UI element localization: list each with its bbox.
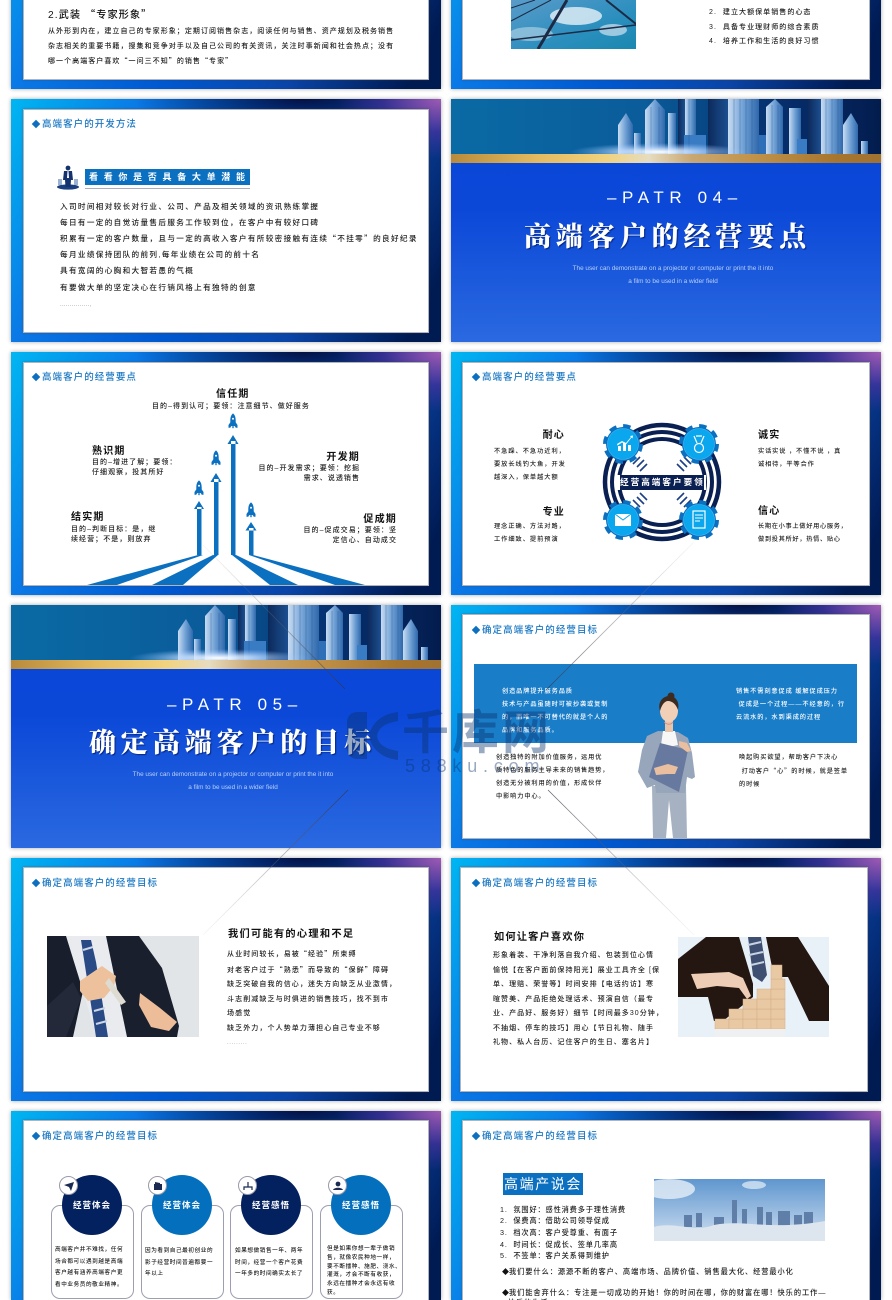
section title: 高端客户的开发方法 (42, 119, 137, 130)
text: value service: 中影响力中心。 (496, 793, 546, 800)
english subtitle: a film to be used in a wider field (628, 278, 718, 285)
text: shortcomings: 缺乏突破自我的信心，迷失方向缺乏从业激情， (227, 981, 397, 988)
text: shortcomings: 场感觉 (227, 1010, 251, 1017)
panel: development methods slide (11, 99, 441, 342)
text: shortcomings (227, 949, 397, 1046)
text: value service: 创造独特的附加价值服务，运用优 (496, 754, 602, 761)
heading: expert image: 2.武装 “专家形象” (48, 6, 152, 21)
banner: big order potential: 看看你是否具备大单潜能 (89, 172, 251, 182)
english subtitle (572, 265, 773, 285)
stage: development: 开发期 (326, 452, 360, 463)
text: potential checklist: ..............., (60, 302, 91, 308)
bullet: what we want: ◆我们要什么：源源不断的客户、高端市场、品牌价值、销售最大化、经营最小化 (502, 1267, 794, 1276)
text: shortcomings: 对老客户过于“熟悉”而导致的“保鲜”障碍 (227, 964, 389, 974)
skyline banner (11, 605, 441, 660)
card: experience four (320, 1175, 403, 1299)
section title: 高端客户的经营要点 (524, 222, 811, 252)
text: potential checklist: 每月业绩保持团队的前列,每年业绩在公司的前十名 (60, 250, 260, 259)
text: potential checklist: 入司时间相对较长对行业、公司、产品及相关领域的资讯熟练掌握 (60, 202, 319, 210)
icon: folder (148, 1176, 167, 1195)
text: brand quality (502, 687, 608, 734)
banner: big order potential (85, 169, 250, 189)
watermark: site logo: 千库网 (402, 706, 552, 759)
stage: acquaintance: 仔细观察，投其所好 (92, 469, 164, 476)
stage: closing (304, 513, 397, 544)
stage: trust: 目的–得到认可；要领：注意细节、做好服务 (152, 403, 310, 410)
text: shortcomings: 缺乏外力，个人势单力薄担心自己专业不够 (227, 1024, 381, 1032)
icon: paper plane (59, 1176, 78, 1195)
stage: closing: 促成期 (363, 514, 397, 525)
point: honesty: 诚实 (758, 430, 780, 441)
card: experience four: 永远在播种才会永远有收 (327, 1281, 395, 1287)
card: experience one: 客户越有涵养高端客户更 (55, 1270, 123, 1276)
panel: expert image slide (11, 0, 441, 89)
point: patience: 越深入，保单越大额 (494, 474, 559, 481)
point: patience: 要放长线钓大鱼，开发 (494, 461, 566, 468)
card: experience three: 如果想做销售一年、两年 (235, 1248, 303, 1254)
stage: establish (71, 511, 156, 543)
english subtitle (132, 771, 333, 791)
text: closing process: 销售不需刻意促成 缓解促成压力 促成是一个过程——不经意的，行 云流水的，水到渠成的过程 (736, 688, 845, 721)
card: experience one: 经营体会 (73, 1200, 111, 1210)
text: potential checklist: 有要做大单的坚定决心在行销风格上有独特的创意 (60, 283, 257, 292)
panel: section 04 cover (451, 99, 881, 342)
section number: –PATR 05– (167, 695, 303, 714)
watermark: site logo (347, 710, 553, 780)
text: tips: 愉悦【在客户面前保持阳光】展业工具齐全 [保 (493, 966, 660, 974)
text: potential checklist (60, 202, 418, 308)
text: tips: 业、产品好、服务好）细节【时间最多30分钟， (493, 1010, 664, 1017)
point: confidence (758, 505, 848, 543)
chart: rocket arrows (87, 414, 365, 585)
point: professional: 理念正确、方法对路， (494, 523, 566, 530)
point: confidence: 信心 (758, 506, 780, 517)
point: confidence: 做到投其所好，热情、贴心 (758, 536, 841, 543)
text: purchase desire: 唤起购买欲望，帮助客户下决心 打动客户“心”的时候，就是签单 的时候 (739, 754, 848, 788)
stage: establish: 续经营；不是，则放弃 (71, 536, 152, 542)
section number: –PATR 04– (607, 188, 743, 207)
point: professional: 工作细致、提前预演 (494, 536, 559, 543)
bullet: what we give up: ◆我们能舍弃什么：专注是一切成功的开始！你的时间在哪，你的财富在哪！快乐的工作— (502, 1288, 826, 1297)
photo: businessman stacking blocks (678, 937, 829, 1037)
watermark: diagonal lines (200, 540, 700, 940)
panel: mindset shortcomings (11, 858, 441, 1101)
section title: 确定高端客户的目标 (89, 728, 376, 758)
text: tips: 不抽烟、停车的技巧】用心【节日礼物、随手 (493, 1024, 654, 1032)
section title: 确定高端客户的经营目标 (42, 878, 158, 889)
stage: acquaintance (92, 444, 177, 476)
heading: make clients like you: 如何让客户喜欢你 (494, 932, 585, 943)
text: brand quality: 技术与产品虽随时可被抄袭或复制 (502, 701, 608, 708)
text: expert image description: 哪一个高端客户喜欢“一问三不知”的销售“专家” (48, 56, 233, 66)
stage: development (258, 451, 360, 482)
photo: glass building and sky (511, 0, 636, 49)
section title: 高端客户的经营要点 (42, 372, 137, 383)
stage: trust: 信任期 (216, 389, 250, 400)
card: experience one (51, 1175, 134, 1299)
text: brand quality: 的，而唯一不可替代的就是个人的 (502, 714, 608, 721)
card: experience one: 高端客户并不难找，任何 (55, 1247, 123, 1253)
card: experience four: 售，就像农民种地一样， (327, 1255, 395, 1261)
card: experience three: 经营感悟 (252, 1200, 290, 1210)
panel: section 05 cover (11, 605, 441, 848)
text: brand quality: 创造品牌提升服务品质 (502, 688, 573, 695)
heading: psychology and shortcomings: 我们可能有的心理和不足 (228, 929, 354, 940)
stage: trust (152, 388, 310, 410)
banner: seminar: 高端产说会 (504, 1176, 582, 1192)
point: patience: 耐心 (543, 430, 565, 441)
card: experience two: 影子经营时间普遍都要一 (145, 1260, 213, 1266)
card: experience four: 但是如果你想一辈子做销 (327, 1246, 395, 1252)
card: experience four: 经营感悟 (342, 1200, 380, 1210)
section title: 高端客户的经营要点 (482, 372, 577, 383)
text: tips: 形象着装、干净利落自我介绍、包装到位心情 (493, 952, 654, 959)
stage: development: 需求、说透销售 (304, 475, 360, 482)
text: brand quality: 品牌和服务品质。 (502, 727, 559, 734)
photo: man in suit adjusting pen (47, 936, 199, 1037)
point: honesty (758, 429, 841, 468)
card: experience four: 获。 (327, 1290, 339, 1296)
english subtitle: The user can demonstrate on a projector or computer or print the it into (133, 771, 333, 778)
text: expert image description: 杂志相关的重要书籍，搜集和竞争对手以及自己公司的有关资讯，关注时事新闻和社会热点；没有 (48, 42, 394, 50)
card: experience two: 年以上 (145, 1271, 164, 1277)
stage: closing: 定信心、自动成交 (333, 537, 397, 544)
text: tips: 暄赞美、产品拒绝处理话术、预演自信（最专 (493, 996, 654, 1002)
photo: city above clouds (654, 1179, 825, 1241)
center label: 经营高端客户要领 (620, 477, 705, 487)
stage: development: 目的–开发需求；要领：挖掘 (258, 465, 360, 472)
text: potential checklist: 每日有一定的自觉访量售后服务工作较到位，在客户中有较好口碑 (60, 218, 319, 227)
list: sales mindset points: 2. 建立大额保单销售的心态 3. 具备专业理财师的综合素质 4. 培养工作和生活的良好习惯 (709, 9, 820, 45)
stage: establish: 目的–判断目标：是，继 (71, 526, 156, 533)
point: professional: 专业 (543, 507, 565, 518)
list: seminar advantages: 1. 氛围好：感性消费多于理性消费 2. 保费高：借助公司领导促成 3. 档次高：客户受尊重、有面子 4. 时间长：促成长、签单几率高 5. 不签单：客户关系得到维护 (500, 1204, 626, 1260)
panel: how customers like you (451, 858, 881, 1101)
section title: 确定高端客户的经营目标 (482, 878, 598, 889)
card: experience three (230, 1175, 313, 1299)
text: tips: 单、理赔、荣誉等】时间安排【电话约访】寒 (493, 981, 654, 988)
skyline banner (451, 99, 881, 154)
diagram: ring with four badges (602, 422, 722, 542)
card: experience two (141, 1175, 224, 1299)
text: value service: 质特色的服务主导未来的销售趋势， (496, 767, 609, 774)
card: experience four: 灌溉，才会不断有收获， (327, 1272, 395, 1278)
card: experience four: 要不断播种、施肥、浇水、 (327, 1264, 401, 1270)
icon: network (238, 1176, 257, 1195)
text: value service: 创造无分被利用的价值，形成伙伴 (496, 780, 602, 787)
text: shortcomings: ......... (227, 1040, 247, 1046)
panel: glass building slide (451, 0, 881, 89)
text: expert image description (48, 26, 394, 66)
point: honesty: 实话实说 ，不懂不说 ，真 (758, 448, 841, 455)
card: experience one: 看中业务员的敬业精神。 (55, 1282, 123, 1288)
text: value service (496, 754, 609, 800)
text: tips (493, 951, 664, 1046)
text: shortcomings: 斗志削减缺乏与时俱进的销售技巧，找不到市 (227, 996, 389, 1002)
text: potential checklist: 具有宽阔的心胸和大智若愚的气概 (60, 266, 194, 275)
text: tips: 礼物、私人台历、记住客户的生日、塞名片】 (493, 1039, 654, 1046)
stage: acquaintance: 目的–增进了解；要领： (92, 459, 177, 466)
english subtitle: The user can demonstrate on a projector or computer or print the it into (573, 265, 773, 272)
point: patience (494, 429, 566, 481)
panel: product seminar (451, 1111, 881, 1300)
blue band (474, 664, 857, 743)
panel: essentials of client management (451, 352, 881, 595)
card: experience three: 时间，经营一个客户花费 (235, 1260, 303, 1266)
section title: 确定高端客户的经营目标 (42, 1131, 158, 1142)
card: experience two: 因为看到自己最初创业的 (145, 1248, 213, 1254)
icon: person (328, 1176, 347, 1195)
text: potential checklist: 积累有一定的客户数量，且与一定的高收入客户有所较密接触有连续“不挂零”的良好纪录 (60, 233, 418, 244)
section title: 确定高端客户的经营目标 (482, 625, 598, 636)
panel: four experience cards (11, 1111, 441, 1300)
point: patience: 不急躁、不急功近利， (494, 448, 566, 455)
stage: closing: 目的–促成交易；要领：坚 (304, 527, 397, 534)
section title: 确定高端客户的经营目标 (482, 1131, 598, 1142)
card: experience three: 一年多的时间确实太长了 (235, 1271, 303, 1277)
text: shortcomings: 从业时间较长，易被“经验”所束缚 (227, 949, 357, 959)
figure: businesswoman with folder (638, 692, 695, 838)
watermark: site logo: 588ku.com (405, 756, 545, 776)
stage: acquaintance: 熟识期 (92, 446, 126, 457)
stage: establish: 结实期 (71, 512, 105, 523)
point: professional (494, 506, 566, 543)
panel: stages of client management (11, 352, 441, 595)
panel: goals with businesswoman (451, 605, 881, 848)
icon: standing businessman (57, 166, 79, 190)
text: expert image description: 从外形到内在，建立自己的专家形象；定期订阅销售杂志，阅读任何与销售、资产规划及税务销售 (48, 28, 394, 35)
card: experience one: 场合都可以遇到越是高端 (55, 1258, 123, 1264)
card: experience two: 经营体会 (163, 1200, 201, 1210)
english subtitle: a film to be used in a wider field (188, 784, 278, 791)
point: confidence: 长期在小事上做好用心服务， (758, 523, 848, 530)
point: honesty: 诚相待，平等合作 (758, 461, 815, 468)
